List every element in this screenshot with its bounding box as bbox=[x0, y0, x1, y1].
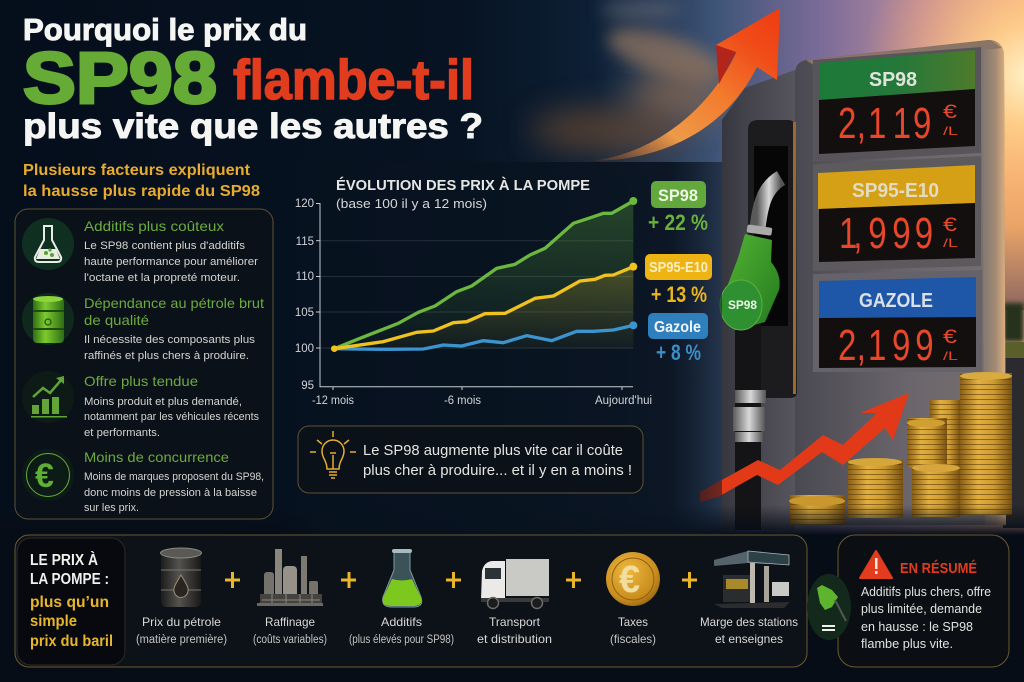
item: taxes: (fiscales) bbox=[610, 632, 656, 646]
fuel pump bbox=[722, 40, 1006, 530]
icon: light bulb bbox=[310, 431, 356, 478]
panel: SP95-E10 price: SP95-E10 bbox=[852, 180, 939, 202]
factor: pétrole brut bbox=[22, 293, 264, 362]
panel: SP95-E10 price: /L bbox=[943, 236, 958, 250]
line chart: 120 bbox=[295, 198, 314, 210]
panel: price composition bbox=[15, 535, 807, 667]
item: additifs: Additifs bbox=[381, 615, 422, 629]
panel: SP98 price: SP98 bbox=[869, 69, 917, 91]
line chart bbox=[295, 197, 652, 407]
line chart: 110 bbox=[296, 271, 314, 283]
heading: le prix à la pompe: LA POMPE : bbox=[30, 571, 109, 588]
item: marge bbox=[700, 551, 798, 646]
pump right edge bbox=[981, 41, 1006, 525]
item: transport bbox=[477, 559, 552, 646]
factor: concurrence: Moins de marques proposent du SP98, bbox=[84, 471, 264, 483]
label: SP98 +22% bbox=[648, 181, 708, 235]
item: transport: Transport bbox=[489, 615, 541, 629]
line chart: Aujourd'hui bbox=[595, 395, 652, 407]
icon: gas station bbox=[714, 551, 790, 608]
pump nozzle: SP98 bbox=[728, 298, 757, 312]
factor: pétrole brut: de qualité bbox=[84, 312, 149, 328]
factor: pétrole brut: raffinés et plus chers à produire. bbox=[84, 350, 249, 362]
item: raffinage: (coûts variables) bbox=[253, 634, 327, 646]
factor: additifs: Le SP98 contient plus d'additifs bbox=[84, 240, 246, 252]
panel: SP95-E10 price: € bbox=[943, 215, 958, 236]
item: transport: et distribution bbox=[477, 632, 552, 646]
label: SP95-E10 +13%: SP95-E10 bbox=[649, 259, 708, 276]
callout: key message bbox=[298, 426, 643, 493]
pump main body bbox=[795, 40, 1006, 525]
factor: offre: Moins produit et plus demandé, bbox=[84, 396, 242, 408]
heading: le prix à la pompe: plus qu’un bbox=[30, 594, 109, 611]
title: SP98 bbox=[23, 39, 217, 119]
panel: en résumé: flambe plus vite. bbox=[861, 636, 953, 651]
line chart: -12 mois bbox=[312, 395, 354, 407]
panel: Gazole price: 2,199 bbox=[838, 322, 934, 370]
label: Gazole +8%: Gazole bbox=[654, 319, 701, 336]
plus sign bbox=[566, 572, 581, 588]
factor: offre: Offre plus tendue bbox=[84, 373, 198, 389]
icon: euro bbox=[22, 449, 74, 501]
item: prix du pétrole: (matière première) bbox=[136, 634, 227, 646]
label: SP98 +22%: + 22 % bbox=[648, 210, 708, 235]
chrome spout bbox=[757, 178, 781, 232]
icon: gold euro coin: € bbox=[619, 559, 640, 601]
heading: le prix à la pompe bbox=[17, 538, 125, 665]
factor: concurrence: Moins de concurrence bbox=[84, 449, 229, 465]
subtitle: Plusieurs facteurs expliquent bbox=[23, 162, 251, 179]
panel: en résumé: plus limitée, demande bbox=[861, 601, 982, 616]
icon: warning triangle bbox=[860, 551, 892, 578]
equals badge with nozzle bbox=[807, 574, 851, 640]
panel: SP98 price: 2,119 bbox=[838, 100, 931, 148]
item: prix du pétrole: Prix du pétrole bbox=[142, 615, 221, 629]
factor: additifs: haute performance pour améliorer bbox=[84, 256, 258, 268]
panel: Gazole price: € bbox=[943, 327, 958, 348]
line chart: 95 bbox=[301, 380, 314, 392]
factor: pétrole brut: Il nécessite des composants plus bbox=[84, 334, 256, 346]
panel: factors bbox=[15, 209, 273, 519]
black hose bbox=[735, 320, 761, 530]
panel: Gazole price: /L bbox=[943, 349, 958, 363]
factor: pétrole brut: Dépendance au pétrole brut bbox=[84, 295, 264, 311]
chart title: ÉVOLUTION DES PRIX À LA POMPE bbox=[336, 177, 590, 194]
panel: SP95-E10 price: 1,999 bbox=[839, 210, 933, 258]
label: Gazole +8% bbox=[648, 313, 708, 365]
heading: le prix à la pompe: prix du baril bbox=[30, 633, 113, 650]
factor: offre: et performants. bbox=[84, 427, 160, 439]
subtitle: la hausse plus rapide du SP98 bbox=[23, 183, 260, 200]
factor: concurrence bbox=[22, 449, 264, 514]
label: SP95-E10 +13%: + 13 % bbox=[651, 282, 707, 307]
factor: additifs: Additifs plus coûteux bbox=[84, 218, 224, 234]
plus sign bbox=[446, 572, 461, 588]
callout: key message: plus cher à produire... et il y en a moins ! bbox=[363, 462, 632, 479]
item: marge: et enseignes bbox=[715, 632, 783, 646]
plus sign bbox=[225, 572, 240, 588]
panel: SP95-E10 price bbox=[813, 156, 981, 271]
icon: green barrel bbox=[22, 293, 74, 345]
title: Pourquoi le prix du bbox=[23, 12, 307, 47]
panel: en résumé: EN RÉSUMÉ bbox=[900, 560, 977, 577]
pump nozzle bbox=[720, 120, 797, 530]
coin stacks bbox=[789, 372, 1012, 525]
metal ferrules bbox=[733, 390, 766, 442]
factor: additifs bbox=[22, 218, 258, 284]
heading: le prix à la pompe: simple bbox=[30, 613, 77, 630]
item: taxes: Taxes bbox=[618, 615, 648, 629]
green nozzle bbox=[722, 234, 780, 330]
label: SP95-E10 +13% bbox=[645, 254, 712, 307]
icon: euro: € bbox=[35, 457, 54, 495]
item: additifs bbox=[349, 549, 454, 646]
bottom fade bbox=[0, 505, 1024, 535]
label: Gazole +8%: + 8 % bbox=[656, 340, 701, 365]
icon: truck bbox=[481, 559, 549, 608]
line chart: 105 bbox=[295, 307, 314, 319]
red zigzag arrow bbox=[700, 393, 909, 502]
panel: en résumé: en hausse : le SP98 bbox=[861, 619, 973, 634]
title: flambe-t-il bbox=[233, 48, 474, 111]
item: taxes bbox=[606, 552, 660, 646]
factor: concurrence: donc moins de pression à la baisse bbox=[84, 487, 257, 499]
plus sign bbox=[341, 572, 356, 588]
callout: key message: Le SP98 augmente plus vite car il coûte bbox=[363, 442, 623, 459]
factor: concurrence: sur les prix. bbox=[84, 502, 139, 514]
chart subtitle: (base 100 il y a 12 mois) bbox=[336, 196, 487, 211]
title: plus vite que les autres ? bbox=[23, 107, 483, 146]
nozzle holder bbox=[748, 120, 797, 398]
icon: refinery bbox=[257, 549, 323, 606]
panel: Gazole price bbox=[813, 270, 982, 372]
panel: en résumé bbox=[838, 535, 1009, 667]
panel: SP98 price: /L bbox=[943, 124, 958, 138]
subtitle bbox=[23, 162, 260, 200]
panel: price chart bbox=[280, 162, 722, 535]
line chart: 100 bbox=[295, 343, 314, 355]
icon: black barrel bbox=[160, 548, 202, 607]
item: additifs: (plus élevés pour SP98) bbox=[349, 634, 454, 646]
big rising orange arrow bbox=[592, 8, 780, 161]
line chart: -6 mois bbox=[444, 395, 481, 407]
title bbox=[23, 12, 483, 146]
panel: SP98 price bbox=[813, 47, 981, 162]
icon: flask bbox=[22, 218, 74, 270]
panel: en résumé: Additifs plus chers, offre bbox=[861, 584, 991, 599]
item: prix du pétrole bbox=[136, 548, 227, 646]
item: marge: Marge des stations bbox=[700, 615, 798, 629]
icon: bar chart with arrow bbox=[22, 371, 74, 423]
panel: Gazole price: GAZOLE bbox=[859, 290, 933, 312]
item: raffinage bbox=[253, 549, 327, 646]
label: SP98 +22%: SP98 bbox=[658, 186, 698, 205]
pump left column bbox=[722, 70, 795, 530]
factor: additifs: l'octane et la propreté moteur. bbox=[84, 272, 240, 284]
factor: offre bbox=[22, 371, 259, 439]
line chart: 115 bbox=[296, 236, 314, 248]
heading: le prix à la pompe: LE PRIX À bbox=[30, 552, 98, 569]
factor: offre: notamment par les véhicules récents bbox=[84, 411, 259, 423]
icon: small green nozzle bbox=[817, 585, 846, 621]
panel: SP98 price: € bbox=[943, 102, 958, 123]
item: raffinage: Raffinage bbox=[265, 615, 315, 629]
icon: green flask bbox=[383, 549, 422, 607]
plus sign bbox=[682, 572, 697, 588]
